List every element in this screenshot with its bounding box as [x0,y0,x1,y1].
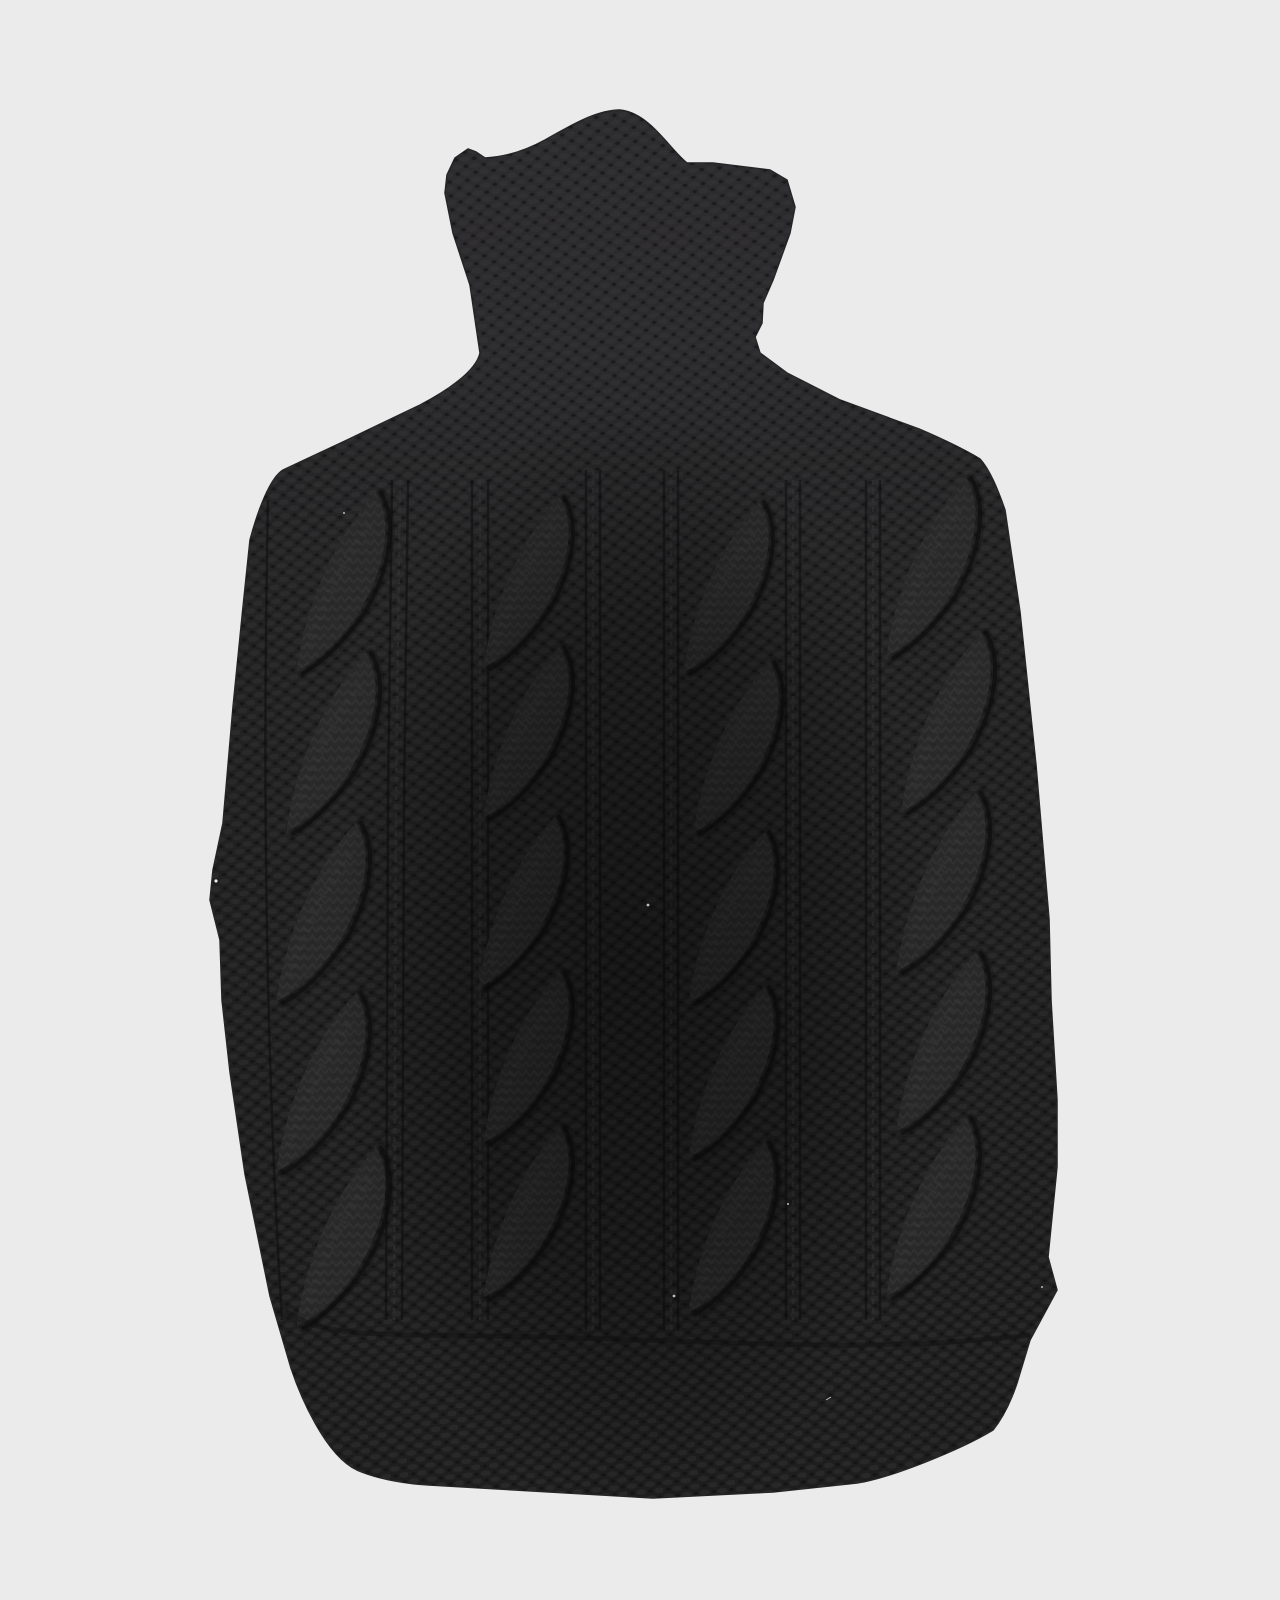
bottom band seam [285,1310,1030,1345]
moss stitch texture [190,90,1080,1520]
center body shading [431,572,829,1330]
rib lines [265,470,880,1330]
cable column A [277,493,390,1328]
illustration: knitted hot water bottle cover [209,109,1058,1499]
cable column C [684,502,783,1314]
lint specks [214,512,1043,1400]
bottle silhouette [210,110,1057,1498]
cable column B [479,497,573,1299]
knit surface [190,90,1080,1520]
cable column D [887,478,995,1298]
